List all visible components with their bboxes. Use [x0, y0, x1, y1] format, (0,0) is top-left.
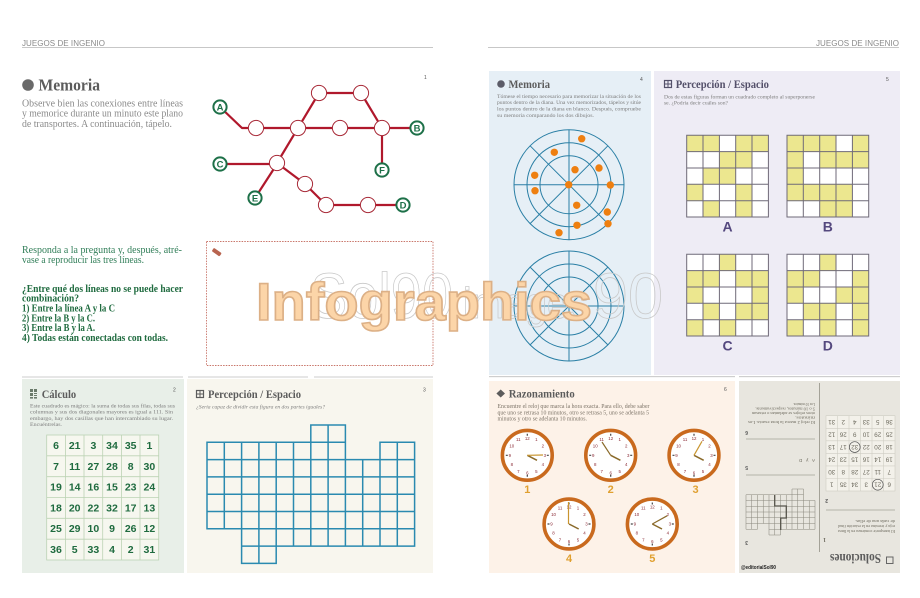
heading: soluciones: Soluciones [830, 550, 881, 565]
panel: percepcion squares: 5 [886, 77, 889, 83]
magic square: 5 [72, 544, 78, 556]
magic square: 11 [69, 461, 80, 473]
solution 2: magic square: 16 [862, 455, 870, 462]
heading: razonamiento: Razonamiento [509, 386, 575, 400]
clock 4: 2 [583, 512, 586, 517]
solution 2: magic square: 35 [839, 480, 847, 488]
clock 2: 12 [608, 436, 614, 441]
magic square: 2 [128, 544, 134, 556]
clock 1: 9 [509, 453, 512, 458]
grid figure [207, 425, 415, 563]
panel: soluciones (upside down): 2 [825, 497, 828, 503]
clock 1: 12 [525, 436, 530, 441]
square D: D [823, 338, 833, 354]
square C [687, 254, 768, 354]
panel: soluciones (upside down): 6 [745, 429, 748, 435]
clock 3: 3 [710, 453, 713, 458]
text block: memoria target [497, 94, 642, 119]
panel: memoria metro intro [22, 75, 427, 130]
magic square: 12 [144, 523, 155, 535]
magic square: 1 [146, 440, 152, 452]
clock labels [524, 484, 699, 565]
empty target [514, 251, 624, 361]
magic square: 28 [106, 461, 118, 473]
magic square: 16 [88, 482, 99, 494]
clock labels: 5 [649, 553, 655, 565]
square A [687, 135, 768, 234]
clock 5: 3 [669, 522, 672, 526]
solution 6: otros relojes se adelantan o retrasan [752, 411, 815, 416]
clock 1: 5 [535, 469, 538, 474]
text block: memoria target: puntos dentro de la diana. Una vez memorizados, tápelos y sitúe [497, 100, 641, 106]
clock 3: 9 [675, 453, 678, 458]
heading: calculo: Cálculo [42, 387, 76, 401]
magic square: 14 [69, 482, 81, 494]
solution 2: magic square: 1 [830, 480, 834, 488]
clock 4: 5 [577, 538, 580, 542]
solution 2: magic square: 28 [851, 468, 858, 475]
magic square: 32 [106, 502, 118, 514]
heading: percepcion: Percepción / Espacio [208, 387, 301, 401]
magic square: 33 [88, 544, 99, 556]
magic square: 30 [144, 461, 155, 473]
solution 2: magic square: 25 [885, 430, 893, 437]
transport map: E [252, 194, 258, 204]
clock 4: 11 [558, 506, 563, 510]
panel: percepcion grid figure: 3 [423, 388, 426, 394]
text block: razonamiento [498, 403, 650, 422]
clock 3: 8 [677, 462, 680, 467]
solution 1 [823, 519, 895, 542]
text block: instructions: y memorice durante un minuto este plano [22, 108, 183, 120]
solution 1: 1 [823, 536, 826, 542]
clock 1: 3 [544, 453, 547, 458]
panel: calculo [22, 379, 184, 573]
panel: memoria metro intro: 1 [424, 75, 427, 81]
solution 2: magic square: 26 [839, 430, 847, 437]
text block: calculo: Encuéntrelas. [30, 422, 63, 428]
text block: question [22, 245, 183, 344]
heading: percepcion squares: Percepción / Espacio [676, 77, 769, 91]
panel: soluciones (upside down): 3 [745, 539, 748, 545]
panel: razonamiento: 6 [724, 387, 727, 393]
clock 3: 2 [708, 443, 711, 448]
magic square [47, 435, 159, 560]
clock 4: 6 [568, 539, 571, 544]
solution 3: grid [746, 489, 815, 535]
clock 2: 4 [625, 462, 628, 467]
panel: razonamiento [489, 381, 735, 573]
magic square: 27 [88, 461, 99, 473]
clock 5: 1 [660, 506, 663, 510]
clock 1: 6 [526, 470, 529, 475]
magic square: 25 [50, 523, 62, 535]
magic square: 17 [125, 502, 137, 514]
solution 2: magic square: 12 [828, 430, 835, 437]
transport map: F [379, 166, 385, 176]
transport map: B [414, 124, 421, 134]
magic square: 34 [106, 440, 118, 452]
magic square: 29 [69, 523, 81, 535]
solution 2: magic square: 29 [874, 430, 881, 437]
clock 5: 4 [667, 530, 670, 536]
logo: @editorialSol90 [741, 565, 776, 571]
magic square: 19 [50, 482, 62, 494]
heading: memoria target: Memoria [508, 77, 550, 91]
solution 2: magic square: 33 [862, 418, 870, 425]
magic square: 24 [144, 482, 155, 494]
solution 6: 5 o 10 minutos, respectivamente. [755, 406, 815, 412]
solution 2: magic square: 7 [887, 468, 891, 475]
solution 2: magic square: 9 [853, 430, 857, 437]
magic square: 8 [128, 461, 134, 473]
clock 1: 2 [542, 443, 545, 448]
magic square: 7 [53, 461, 59, 473]
clock 1: 1 [535, 437, 538, 442]
solution 2: magic square: 5 [876, 418, 880, 425]
clock 4: 9 [550, 522, 553, 526]
text block: question: Responda a la pregunta y, después, atré- [22, 245, 182, 256]
clock 5: 5 [660, 538, 663, 542]
magic square: 26 [125, 523, 137, 535]
text block: calculo [30, 402, 176, 428]
clock 5: 10 [634, 512, 640, 517]
clock 5: 12 [650, 504, 655, 510]
clock 2: 1 [618, 437, 621, 442]
solution 1: roja y termina en la estación final [837, 524, 895, 529]
icon: pencil [212, 248, 222, 257]
clock 1: 7 [517, 469, 520, 474]
clock 2: 6 [609, 470, 612, 475]
square B: B [823, 218, 833, 234]
clock 5: 7 [642, 538, 645, 542]
solution 6: El reloj 2 marca la hora exacta. Los [747, 420, 815, 425]
clock 3: 10 [676, 443, 681, 448]
clock 4 [544, 499, 594, 549]
text block: calculo: embargo, hay dos casillas que han intercambiado su lugar. [30, 416, 174, 422]
magic square: 23 [125, 482, 137, 494]
solution 6: Los 10 minutos. [793, 402, 815, 407]
clock 4: 8 [552, 530, 555, 536]
square A: A [722, 218, 733, 234]
clock labels: 4 [566, 553, 573, 565]
text block: calculo: Este cuadrado es mágico: la suma de todas sus filas, todas sus [30, 402, 176, 409]
text block: memoria target: Tómese el tiempo necesario para memorizar la situación de los [497, 94, 642, 100]
solution 3 cut line [775, 495, 786, 530]
magic square: 13 [144, 502, 155, 514]
transport map: D [400, 200, 407, 212]
text block: percepcion squares: Dos de estas figuras forman un cuadrado completo al superponerse [664, 94, 815, 101]
magic square: 4 [109, 544, 115, 556]
solution 2: magic square: 15 [851, 455, 858, 462]
solution 2: magic square: 8 [841, 468, 845, 475]
watermark [256, 260, 663, 332]
panel: percepcion squares [654, 71, 900, 375]
text block: question: 2) Entre la B y la C. [22, 313, 95, 324]
solution 2: magic square: 23 [839, 455, 847, 462]
clock 2 [586, 430, 636, 480]
solution 2: magic square: 34 [851, 480, 858, 488]
solution 2: magic square: 21 [874, 480, 881, 488]
solution 2: magic square: 18 [885, 443, 893, 450]
clock 4: 7 [559, 538, 562, 542]
panel: percepcion grid figure [187, 379, 433, 573]
clock 5: 2 [667, 512, 670, 517]
solution 5: A y D [798, 458, 815, 463]
text block: razonamiento: minutos y otro se adelanta 10 minutos. [498, 415, 587, 422]
text block: razonamiento: que uno se retrasa 10 minutos, otro se retrasa 5, uno se adelanta 5 [498, 409, 649, 416]
clock 1: 10 [509, 443, 515, 448]
text block: percepcion question: ¿Sería capaz de dividir esta figura en dos partes iguales? [196, 404, 325, 410]
panel: soluciones (upside down) [739, 381, 900, 573]
dividers [22, 376, 900, 378]
clock 2: 8 [594, 462, 597, 467]
solution 2: magic square: 22 [862, 443, 870, 450]
magic square: 3 [90, 440, 96, 452]
solution 2: magic square: 31 [828, 418, 835, 425]
target with dots [514, 130, 624, 240]
clock 1: 4 [542, 462, 545, 467]
clock 5 [627, 499, 677, 549]
text block: question: vase a reproducir las tres líneas. [22, 255, 144, 266]
transport map: A [217, 102, 224, 114]
watermark: Infographics [256, 273, 592, 332]
clock 5: 8 [636, 530, 639, 536]
magic square: 20 [69, 502, 81, 514]
square B [787, 135, 869, 234]
clock 4: 1 [577, 506, 580, 510]
text block: instructions: Observe bien las conexiones entre líneas [22, 98, 183, 110]
solution 2: magic square: 6 [887, 480, 891, 488]
heading: calculo [30, 387, 76, 401]
solution 2: magic square: 17 [839, 443, 847, 450]
clock 3 [669, 430, 719, 480]
solution 2: magic square: 3 [864, 480, 868, 488]
drawing box with pencil [206, 242, 433, 366]
clock labels: 1 [524, 484, 530, 496]
solution 2: magic square: 2 [841, 418, 845, 425]
square C: C [722, 338, 733, 354]
clock 3: 11 [683, 437, 688, 442]
clock labels: 3 [692, 484, 699, 496]
clock 4: 4 [583, 530, 586, 536]
solution 2: magic square: 4 [853, 418, 857, 425]
text block: calculo: columnas y sus dos diagonales mayores es igual a 111. Sin [30, 410, 173, 416]
clock 2: 5 [618, 469, 621, 474]
text block: question: ¿Entre qué dos líneas no se puede hacer [22, 284, 183, 295]
text block: memoria target: su memoria comparando los dos dibujos. [497, 113, 595, 119]
clock 2: 9 [592, 453, 595, 458]
clock 4: 3 [585, 522, 588, 526]
magic square: 31 [144, 544, 155, 556]
text block: question: 4) Todas están conectadas con todas. [22, 333, 168, 344]
transport map: C [217, 160, 224, 170]
text block: question: 3) Entre la B y la A. [22, 323, 95, 334]
solution 1: de cada una de ellas. [855, 519, 895, 524]
clock 4: 10 [551, 512, 556, 517]
transport map [213, 85, 424, 213]
clock 2: 3 [627, 453, 630, 458]
clock 3: 12 [692, 436, 697, 441]
magic square: 21 [69, 440, 81, 452]
text block: memoria target: los puntos dentro de la diana en blanco. Después, compruebe [497, 106, 641, 112]
clock 5: 6 [651, 539, 654, 544]
clock 2: 11 [599, 437, 605, 442]
magic square: 9 [109, 523, 115, 535]
magic square: 18 [50, 502, 62, 514]
magic square: 35 [125, 440, 137, 452]
clock 1 [502, 430, 552, 480]
clock 2: 10 [593, 443, 598, 448]
panel: soluciones (upside down): 5 [745, 464, 748, 470]
text block: instructions [22, 98, 183, 130]
clock 5: 9 [634, 522, 637, 526]
clock 5: 11 [641, 506, 646, 510]
text block: question: 1) Entre la línea A y la C [22, 304, 115, 314]
clock labels: 2 [608, 484, 614, 496]
solution 2: magic square: 13 [828, 443, 835, 450]
panel: memoria target [489, 71, 651, 375]
text block: question: combinación? [22, 294, 79, 305]
solution 2: magic square [826, 416, 895, 491]
watermark: Sol90 [310, 260, 453, 332]
solution 2: magic square: 10 [862, 430, 870, 437]
clock 2: 2 [625, 443, 628, 448]
clock 2: 7 [600, 469, 603, 474]
text block: percepcion squares: se. ¿Podría decir cuáles son? [664, 101, 728, 107]
solution 6: minutos. [795, 416, 815, 420]
panel: memoria target: 4 [640, 77, 643, 83]
solution 2: magic square: 32 [851, 443, 858, 450]
square D [787, 254, 869, 354]
clock 3: 5 [702, 469, 705, 474]
clock 3: 7 [684, 469, 687, 474]
header: left page: JUEGOS DE INGENIO [22, 39, 105, 48]
solution 2: magic square: 24 [828, 455, 835, 462]
solution 2: magic square: 36 [885, 418, 893, 425]
clock 1: 8 [511, 462, 514, 467]
magic square: 36 [50, 544, 62, 556]
magic square: 22 [88, 502, 99, 514]
clock 3: 6 [693, 470, 696, 475]
clock 1: 11 [516, 437, 521, 442]
magic square: 6 [53, 440, 59, 452]
clock 4: 12 [567, 504, 572, 510]
solution 6 [747, 402, 815, 425]
magic square: 10 [88, 523, 99, 535]
solution 1: El transporte comienza en la línea [838, 529, 895, 534]
watermark: images [463, 279, 588, 328]
solution 2: magic square: 27 [862, 468, 870, 475]
clock 3: 1 [702, 437, 705, 442]
solution 2: magic square: 30 [828, 468, 835, 475]
text block: razonamiento: Encuentre el reloj que marca la hora exacta. Para ello, debe saber [498, 403, 650, 410]
solution 2: magic square: 19 [885, 455, 893, 462]
solution 2: magic square: 11 [874, 468, 881, 475]
heading: memoria: Memoria [38, 76, 100, 94]
watermark: 90 [593, 260, 663, 332]
heading: soluciones [830, 550, 893, 565]
header: right page: JUEGOS DE INGENIO [816, 39, 899, 48]
magic square: 15 [106, 482, 118, 494]
text block: percepcion squares [664, 94, 815, 107]
solution 2: magic square: 14 [874, 455, 881, 462]
text block: instructions: de transportes. A continuación, tápelo. [22, 119, 172, 130]
panel: calculo: 2 [173, 388, 176, 394]
solution 2: magic square: 20 [874, 443, 881, 450]
clock 3: 4 [708, 462, 711, 467]
